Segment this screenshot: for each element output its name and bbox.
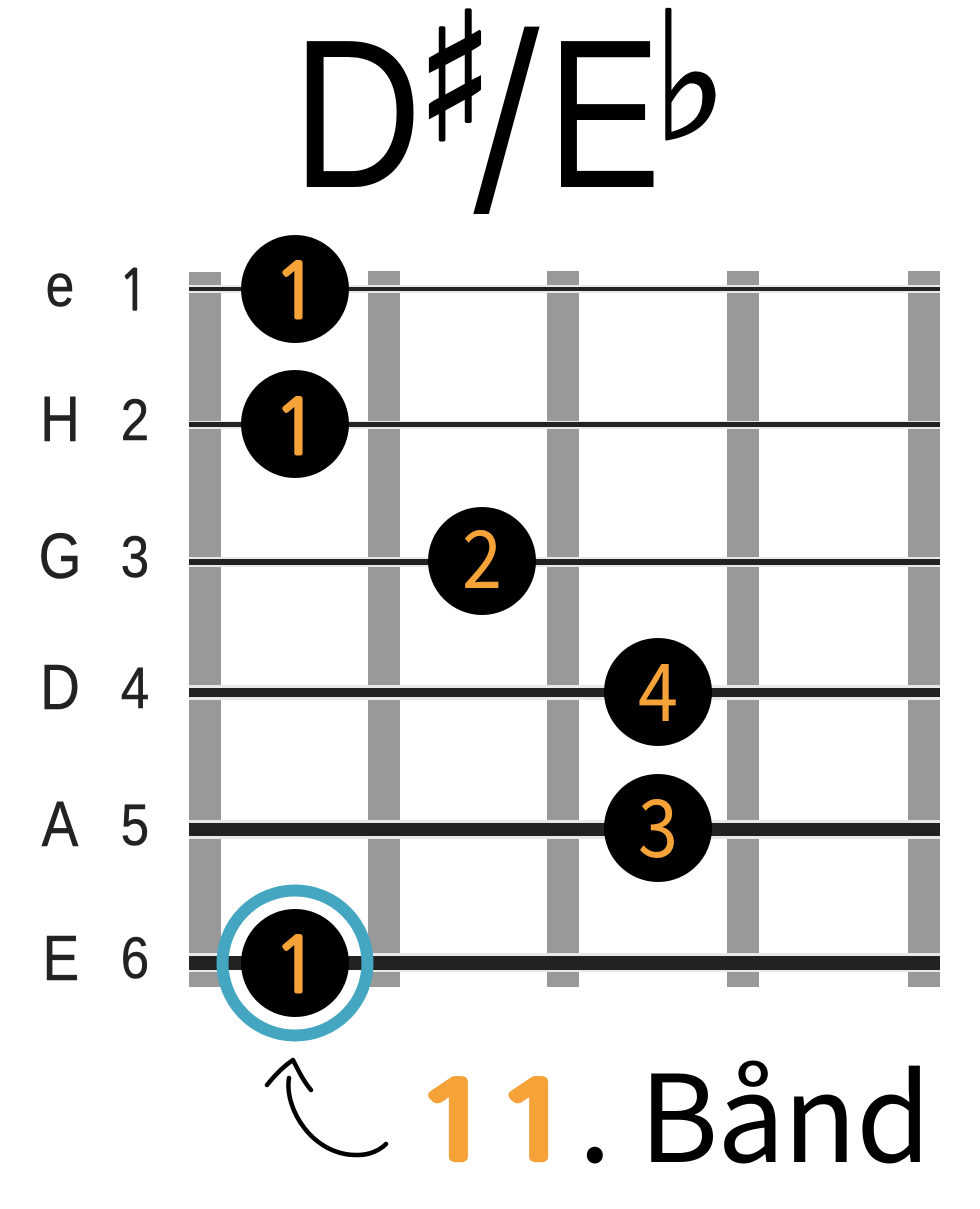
string inside ring [224,956,366,970]
finger dots: 1 [273,927,319,1003]
string names [39,251,81,994]
string names: D [40,651,80,723]
string numbers [118,262,149,991]
string names: H [40,383,80,455]
string names: A [42,788,79,860]
title: D [292,0,422,232]
guitar strings [189,285,940,972]
fretboard frets [189,271,940,987]
title: E [547,0,661,232]
finger dots: 4 [638,628,678,744]
string names: G [39,520,81,592]
root note ring [222,890,368,1036]
string numbers: 2 [121,388,149,453]
curved arrow [267,1060,386,1155]
title [292,0,728,270]
root note ring background [222,890,368,1036]
string numbers: 5 [121,793,149,858]
finger dots: 1 [273,253,319,329]
fret label: 11 [414,1069,574,1174]
string numbers: 3 [121,525,149,590]
finger dots: 3 [638,764,678,880]
finger dots [241,235,712,1017]
finger dots: 2 [462,495,502,611]
string names: E [43,922,79,994]
fret label: . Bånd [578,1022,931,1197]
string numbers: 4 [121,656,149,721]
finger dots: 1 [273,389,319,465]
fret label [414,1022,931,1197]
string numbers: 1 [118,262,148,318]
string names: e [46,251,74,319]
string numbers: 6 [121,926,149,991]
